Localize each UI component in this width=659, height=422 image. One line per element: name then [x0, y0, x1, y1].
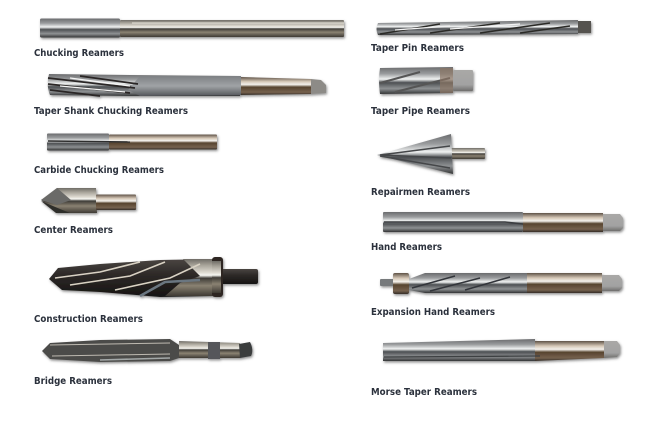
label: morse taper reamers: Morse Taper Reamers [371, 387, 477, 398]
label: taper pin reamers: Taper Pin Reamers [371, 43, 464, 54]
reamer: hand [383, 212, 623, 232]
reamer: taper pipe [379, 67, 473, 94]
label: bridge reamers: Bridge Reamers [34, 376, 112, 387]
reamer: carbide chucking [47, 134, 217, 150]
label: taper shank chucking reamers: Taper Shank Chucking Reamers [34, 106, 188, 117]
reamer: repairmen [377, 134, 485, 174]
label: repairmen reamers: Repairmen Reamers [371, 187, 470, 198]
label: hand reamers: Hand Reamers [371, 242, 442, 253]
label: expansion hand reamers: Expansion Hand Reamers [371, 307, 495, 318]
reamer: taper pin [376, 20, 591, 35]
reamer: expansion hand [380, 273, 622, 294]
reamer: taper shank chucking [48, 74, 326, 96]
label: taper pipe reamers: Taper Pipe Reamers [371, 106, 470, 117]
label: carbide chucking reamers: Carbide Chucking Reamers [34, 165, 164, 176]
reamer: center [41, 188, 136, 213]
label: center reamers: Center Reamers [34, 225, 113, 236]
label: chucking reamers: Chucking Reamers [34, 48, 124, 59]
reamer: chucking [40, 18, 344, 38]
reamer: bridge [42, 339, 252, 362]
reamer: construction [49, 257, 258, 297]
label: construction reamers: Construction Reamers [34, 314, 143, 325]
reamer: morse taper [383, 339, 620, 361]
